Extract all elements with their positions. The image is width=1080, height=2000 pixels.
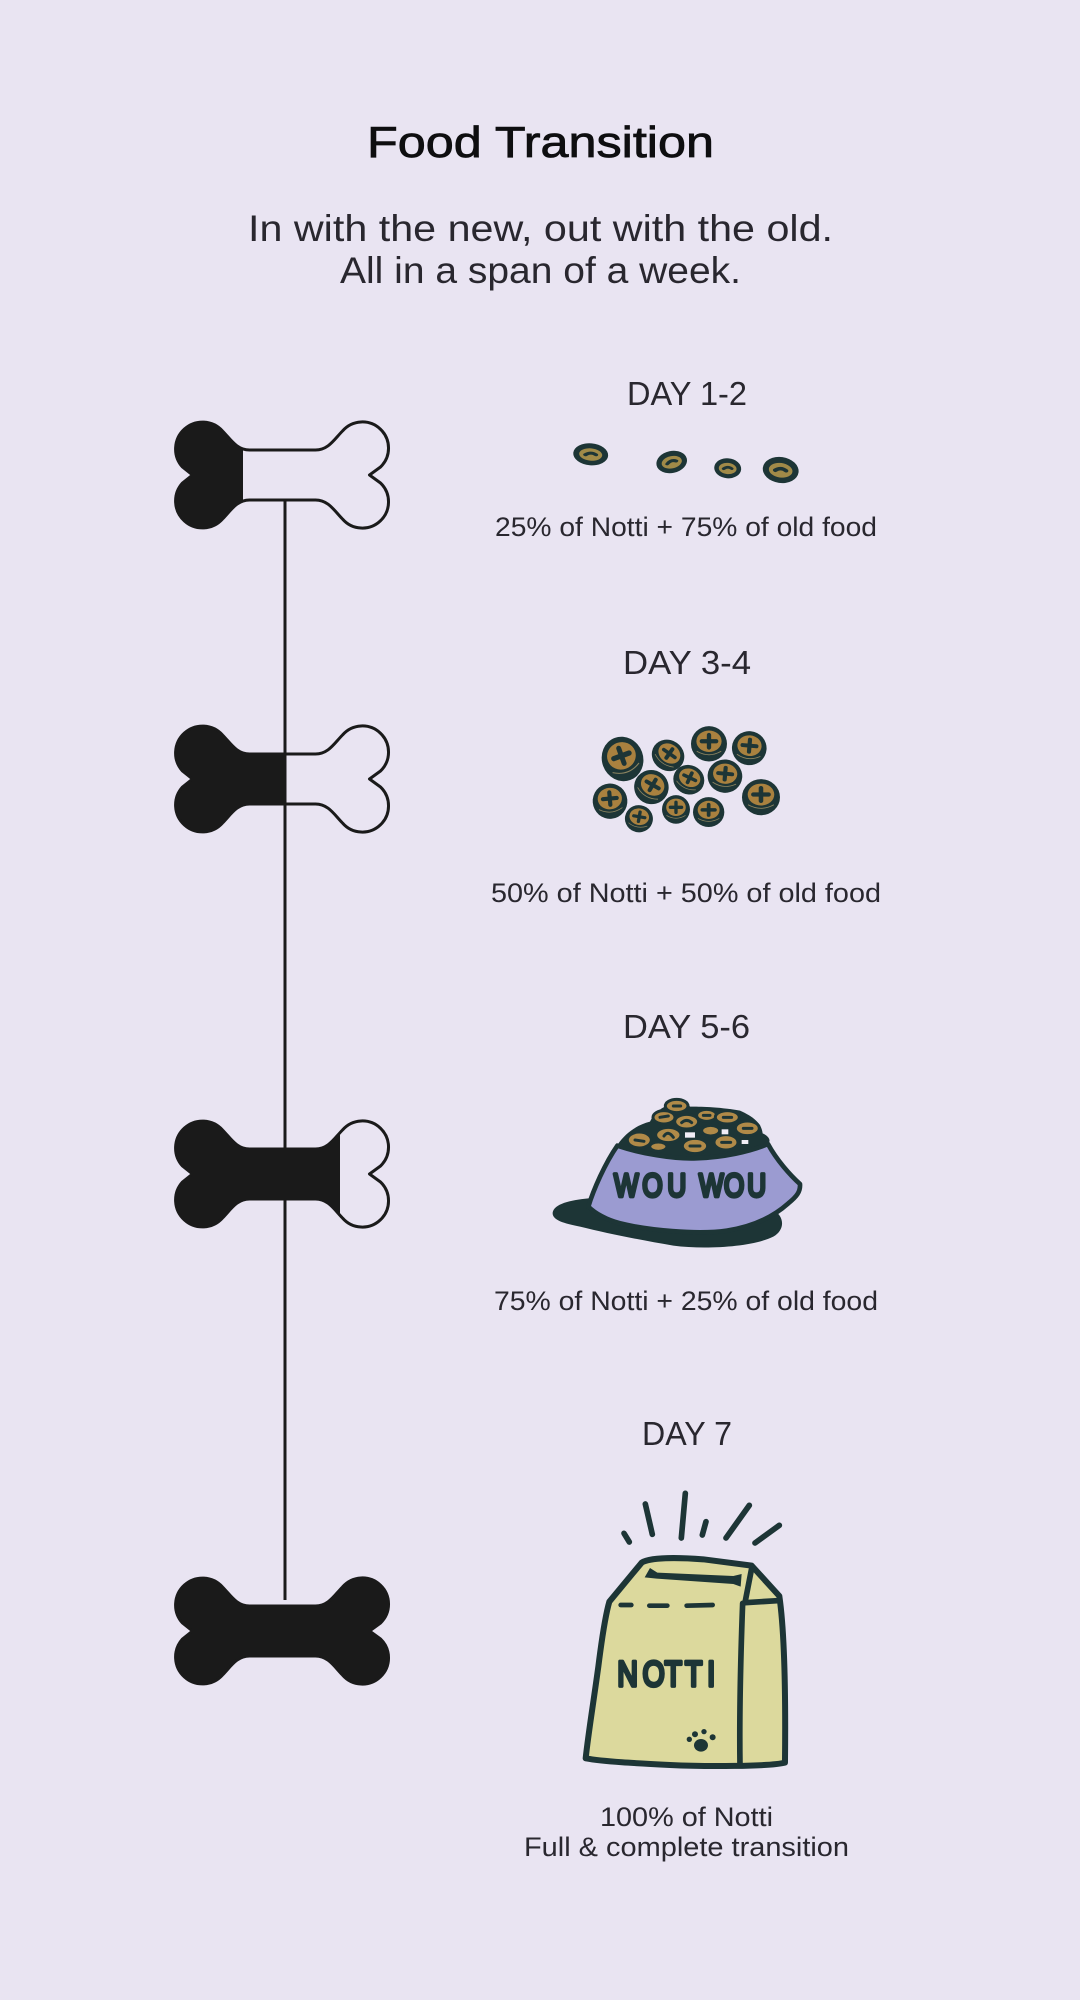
label: day 1-2: DAY 1-2 (627, 375, 747, 412)
food marks (635, 1106, 752, 1146)
caption: day 3-4: 50% of Notti + 50% of old food (491, 878, 881, 908)
label: day 7: DAY 7 (642, 1415, 732, 1452)
bone: 100% filled (176, 1578, 389, 1684)
icon: food bag (586, 1493, 785, 1766)
icon: four kibbles (572, 442, 800, 485)
bowl shadow (553, 1198, 782, 1248)
bag folds (740, 1567, 777, 1765)
caption: day 7: Full & complete transition (524, 1832, 849, 1862)
bowl lettering: WOU WOU (614, 1168, 766, 1204)
title: Food Transition (367, 118, 714, 167)
caption: day 7 (524, 1802, 849, 1862)
bag body (586, 1558, 785, 1766)
subtitle: All in a span of a week. (340, 250, 741, 291)
bone: 50% filled (176, 726, 389, 832)
timeline line (284, 500, 286, 1600)
subtitle (248, 208, 833, 291)
label: day 5-6: DAY 5-6 (623, 1008, 750, 1045)
caption: day 1-2: 25% of Notti + 75% of old food (495, 512, 877, 542)
bag dashes (621, 1598, 713, 1613)
caption: day 7: 100% of Notti (600, 1802, 773, 1832)
sparkle rays (624, 1493, 779, 1543)
bone: 75% filled (176, 1121, 389, 1227)
bone: 25% filled (176, 422, 389, 528)
icon: kibble pile (591, 726, 780, 835)
subtitle: In with the new, out with the old. (248, 208, 833, 249)
label: day 3-4: DAY 3-4 (623, 644, 751, 681)
food gaps (685, 1129, 748, 1144)
food mound (617, 1100, 770, 1160)
bag top crease (645, 1568, 742, 1587)
food pieces (627, 1099, 759, 1154)
bowl body (588, 1144, 800, 1232)
icon: bowl with food (553, 1099, 800, 1248)
caption: day 5-6: 75% of Notti + 25% of old food (494, 1286, 878, 1316)
paw print (687, 1729, 716, 1752)
bag lettering: NOTTI (617, 1654, 715, 1694)
